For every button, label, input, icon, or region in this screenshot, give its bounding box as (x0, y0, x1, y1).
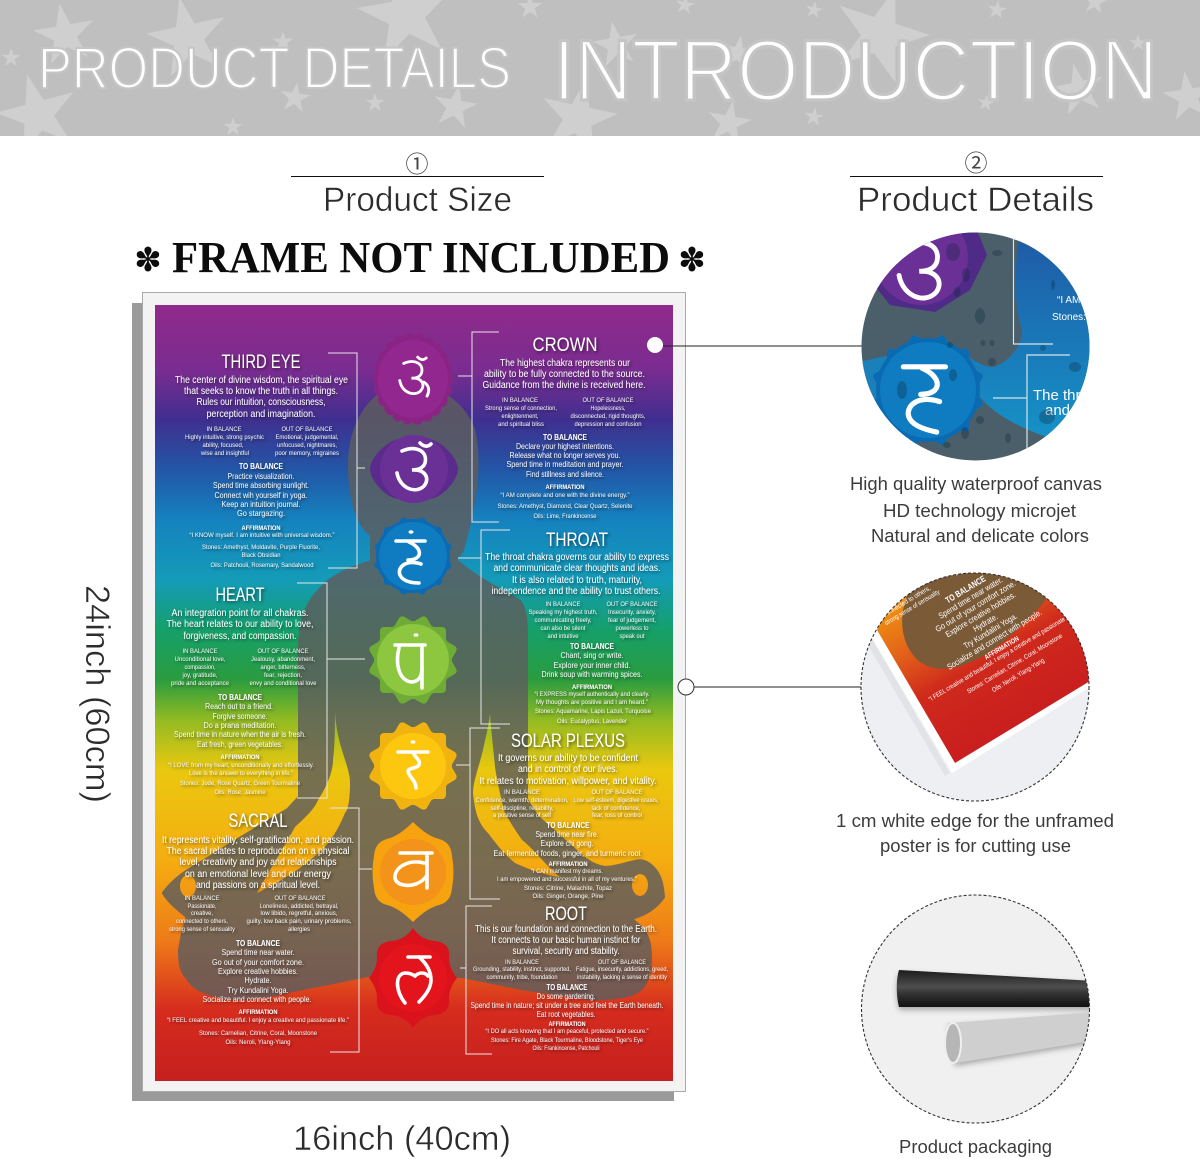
detail circle border: packaging (862, 895, 1090, 1123)
text block: sacral: Go out of your comfort zone. (212, 957, 304, 967)
text block: crown: ability to be fully connected to the source. (484, 369, 645, 380)
text block: crown: TO BALANCE (543, 432, 587, 442)
text block: throat: and intuitive (548, 633, 579, 640)
enlarged throat symbol (872, 334, 984, 446)
text block: throat: speak out (620, 633, 645, 640)
text block: crown: AFFIRMATION (546, 484, 585, 491)
text block: third eye: THIRD EYE (222, 352, 300, 373)
text block: crown: disconnected, rigid thoughts, (570, 413, 646, 420)
callout line: white edge (678, 679, 903, 695)
icon: solar plexus chakra (368, 721, 458, 811)
text block: throat: Insecurity, anxiety, (608, 609, 656, 616)
poster mockup (132, 292, 686, 1101)
text block: third eye: Keep an intuition journal. (222, 499, 300, 509)
text block: solar plexus: IN BALANCE (504, 789, 541, 796)
text block: crown: Oils: Lime, Frankincense (534, 513, 597, 520)
text block: third eye: Connect wih yourself in yoga. (214, 490, 308, 500)
text block: root: survival, security and stability. (512, 946, 620, 957)
text block: sacral: Spend time near water. (222, 947, 294, 957)
text block: heart: TO BALANCE (218, 692, 262, 702)
text block: heart: An integration point for all chakras. (172, 608, 308, 619)
text block: sacral: low libido, regretful, anxious, (260, 910, 338, 917)
enlarged poster bracket lines (993, 233, 1070, 450)
caption: white edge (836, 811, 1114, 856)
text block: solar plexus: Eat fermented foods, ginger, and turmeric root (494, 848, 641, 858)
text block: crown: Spend time in meditation and prayer. (506, 459, 624, 469)
text block: solar plexus: fear, loss of control (592, 812, 642, 819)
text block: solar plexus: Spend time near fire. (536, 829, 598, 839)
text block: heart: Reach out to a friend. (205, 701, 273, 711)
detail circle: product packaging (862, 895, 1090, 1123)
text block: third eye: TO BALANCE (239, 461, 283, 471)
text block: third eye: Spend time absorbing sunlight. (213, 480, 309, 490)
text block: throat: It is also related to truth, maturity, (512, 575, 642, 586)
text block: throat: powerless to (616, 625, 649, 632)
white tube (948, 1012, 1095, 1063)
text block: throat: AFFIRMATION (572, 684, 612, 691)
gap between left arm and torso (257, 710, 350, 893)
section heading: product size (291, 151, 544, 219)
rotated poster text: guilty, low back pain, urinary problems, (952, 516, 1046, 576)
text block: crown: Declare your highest intentions. (516, 441, 614, 451)
text block: root: AFFIRMATION (548, 1021, 586, 1028)
caption: white edge: poster is for cutting use (880, 836, 1071, 856)
text block: third eye: perception and imagination. (206, 409, 316, 420)
gap between right arm and torso (473, 713, 560, 877)
text block: sacral: guilty, low back pain, urinary problems, (246, 918, 352, 925)
text block: root: Do some gardening. (536, 991, 596, 1001)
enlarged poster text: and communicate (1045, 402, 1163, 419)
dimension label: width: 16inch (40cm) (293, 1120, 511, 1158)
caption: canvas features (850, 474, 1102, 546)
rotated poster text: Try Kundalini Yoga. (962, 611, 1019, 651)
tube end cap (945, 1023, 961, 1063)
text block: heart: Jealousy, abandonment, (251, 656, 315, 663)
text block: root: This is our foundation and connection to the Earth. (475, 924, 657, 935)
text block: throat: “I EXPRESS myself authentically and clearly. (534, 691, 650, 698)
text block: heart: compassion, (184, 664, 216, 671)
text block: throat: and communicate clear thoughts and ideas. (494, 563, 660, 574)
text block: throat: TO BALANCE (570, 641, 614, 651)
text block: throat: The throat chakra governs our ability to express (485, 552, 669, 563)
text block: sacral: level, creativity and joy and relationships (180, 857, 336, 868)
text block: solar plexus: OUT OF BALANCE (592, 789, 643, 796)
rotated poster text: TO BALANCE (944, 574, 987, 605)
detail circle: waterproof canvas close-up (862, 232, 1090, 460)
rotated poster text: Explore creative hobbies. (944, 589, 1017, 639)
text block: third eye: Black Obsidian (242, 552, 281, 559)
icon: crown chakra (378, 340, 448, 418)
text block: crown: IN BALANCE (502, 397, 539, 404)
text block: third eye: ability, focused, (202, 442, 244, 449)
text block: throat: communicating freely, (534, 617, 592, 624)
section heading: product details: ② (964, 150, 988, 176)
text block: root: IN BALANCE (505, 959, 540, 966)
text block: sacral: It represents vitality, self-gratification, and passion. (162, 835, 354, 846)
poster gradient art (155, 305, 673, 1081)
text block: solar plexus: “I CAN manifest my dreams. (531, 868, 603, 875)
caption: canvas features: High quality waterproof canvas (850, 474, 1102, 494)
text block: sacral: Oils: Neroli, Ylang-Ylang (226, 1039, 291, 1046)
text block: sacral: and passions on a spiritual level. (196, 880, 320, 891)
rotated poster text: Stones: Carnelian, Citrine, Coral, Moonstone (966, 633, 1064, 695)
text block: crown: OUT OF BALANCE (582, 397, 634, 404)
text block: sacral: connected to others, (176, 918, 228, 925)
caption: product packaging: Product packaging (899, 1137, 1052, 1157)
text block: sacral: creative, (191, 910, 213, 917)
text block: solar plexus: a positive sense of self (493, 812, 551, 819)
text block: solar plexus: Explore chi gong. (540, 838, 594, 848)
text block: solar plexus: Low self-esteem, digestive issues, (574, 797, 659, 804)
text block: solar plexus: I am empowered and successful in all of my ventures.” (497, 876, 637, 883)
enlarged poster text (1033, 296, 1085, 415)
text block: root: TO BALANCE (546, 982, 588, 992)
text block: throat: OUT OF BALANCE (606, 601, 658, 608)
text block: sacral: Try Kundalini Yoga. (228, 985, 288, 995)
text block: solar plexus: Confidence, warmth, determination, (476, 797, 569, 804)
text block: root: It connects to our basic human instinct for (492, 935, 641, 946)
text block: third eye: OUT OF BALANCE (282, 426, 333, 433)
enlarged poster text: The throat chakra (1033, 387, 1151, 404)
text block: heart: AFFIRMATION (220, 754, 260, 761)
text block: sacral: OUT OF BALANCE (274, 895, 326, 902)
text block: third eye: Practice visualization. (228, 471, 294, 481)
brown silhouette fragment (902, 565, 1047, 669)
text block: crown: Find stillness and silence. (526, 469, 604, 479)
rotated poster text: connected to others, (883, 585, 932, 618)
callout line: canvas (647, 337, 862, 353)
poster text blocks (162, 335, 669, 1052)
text block: root (470, 904, 668, 1052)
caption: canvas features: HD technology microjet (883, 501, 1076, 521)
text block: crown: Release what no longer serves you. (510, 450, 620, 460)
text block: third eye: “I KNOW myself. I am intuitive with universal wisdom.” (190, 532, 334, 539)
text block: heart: fear, rejection, (264, 672, 302, 679)
detail circle border: white edge (861, 573, 1089, 801)
text block: throat: Oils: Eucalyptus, Lavender (557, 718, 628, 725)
text block: sacral: The sacral relates to reproduction on a physical (166, 846, 350, 857)
header banner (0, 0, 1200, 136)
text block: third eye: poor memory, migraines (275, 450, 340, 457)
text block: heart: Spend time in nature when the air is fresh. (174, 729, 306, 739)
text block: third eye: Emotional, judgemental, (276, 434, 339, 441)
text block: heart: Eat fresh, green vegetables. (197, 739, 283, 749)
notice: frame not included: FRAME NOT INCLUDED (172, 233, 670, 282)
text block: root: instability, lacking a sense of identity (577, 974, 668, 981)
text block: sacral: on an emotional level and our energy (185, 869, 331, 880)
icon: sacral chakra (372, 822, 454, 922)
text block: throat: Explore your inner child. (554, 660, 630, 670)
rotated poster text: Oils: Neroli, Ylang-Ylang (991, 657, 1046, 694)
text block: crown: and spiritual bliss (498, 421, 545, 428)
text block: third eye: that seeks to know the truth in all things. (184, 386, 338, 397)
section heading: product size: Product Size (323, 181, 512, 219)
text block: sacral: SACRAL (228, 811, 288, 832)
text block: crown: CROWN (532, 335, 598, 356)
meditating body silhouette (164, 388, 663, 998)
connector brackets (297, 332, 510, 1054)
icon: throat chakra (373, 516, 453, 596)
text block: heart: anger, bitterness, (260, 664, 306, 671)
text block: throat: fear of judgement, (608, 617, 656, 624)
text block: heart: envy and conditional love (250, 680, 317, 687)
text block: sacral: strong sense of sensuality (169, 926, 236, 933)
text block: root: community, tribe, foundation (486, 974, 558, 981)
rotated poster text: “I FEEL creative and beautiful. I enjoy a creative and passionate life.” (928, 610, 1077, 703)
rotated poster text: AFFIRMATION (984, 635, 1021, 662)
text block: root: “I DO all acts knowing that I am peaceful, protected and secure.” (486, 1028, 648, 1035)
text block: third eye: IN BALANCE (206, 426, 242, 433)
text block: sacral: Stones: Carnelian, Citrine, Coral, Moonstone (199, 1030, 317, 1037)
text block: root: Stones: Fire Agate, Black Tourmaline, Bloodstone, Tiger's Eye (491, 1037, 643, 1044)
text block: solar plexus: SOLAR PLEXUS (511, 731, 625, 752)
text block: root: Spend time in nature; sit under a tree and feel the Earth beneath. (470, 1000, 664, 1010)
text block: sacral (162, 811, 354, 1046)
text block: heart: Forgive someone. (212, 711, 268, 721)
text block: third eye: Highly intuitive, strong psychic (185, 434, 265, 441)
notice: frame not included: ✽ (678, 240, 706, 279)
black tube (897, 970, 1095, 1007)
text block: root: Oils: Frankincense, Patchouli (532, 1045, 600, 1052)
enlarged poster text: “I AM complete (1057, 295, 1124, 306)
notice: frame not included: ✽ (134, 240, 162, 279)
text block: third eye (175, 352, 348, 569)
text block: throat: Speaking my highest truth, (528, 609, 598, 616)
text block: throat: Chant, sing or write. (560, 650, 624, 660)
text block: throat: Stones: Aquamarine, Lapis Lazuli, Turquoise (535, 708, 651, 715)
water droplets (897, 243, 1081, 448)
caption: white edge: 1 cm white edge for the unframed (836, 811, 1114, 831)
text block: third eye: Rules our intuition, consciousness, (196, 397, 326, 408)
rotated poster text: strong sense of sensuality (884, 588, 942, 627)
header title: product details: PRODUCT DETAILS (38, 36, 511, 101)
text block: root: Eat root vegetables. (536, 1009, 596, 1019)
text block: sacral: IN BALANCE (184, 895, 220, 902)
text block: solar plexus: lack of confidence, (592, 805, 641, 812)
text block: heart: Love is the answer to everything in life.” (189, 770, 293, 777)
text block: heart: Unconditional love, (174, 656, 226, 663)
text block: sacral: AFFIRMATION (238, 1009, 278, 1016)
text block: solar plexus: It governs our ability to be confident (498, 753, 638, 764)
text block: throat: My thoughts are positive and I am heard.” (536, 699, 648, 706)
text block: crown: Stones: Amethyst, Diamond, Clear Quartz, Selenite (498, 503, 633, 510)
text block: sacral: Explore creative hobbies. (218, 966, 298, 976)
poster shadow (132, 303, 674, 1101)
text block: crown: enlightenment, (502, 413, 539, 420)
poster white edge (142, 292, 686, 1092)
text block: crown: “I AM complete and one with the divine energy.” (500, 492, 630, 499)
text block: throat: THROAT (546, 530, 608, 551)
text block: heart: IN BALANCE (182, 648, 218, 655)
section heading: product size: ① (406, 151, 428, 177)
header title: introduction: INTRODUCTION (553, 23, 1158, 119)
text block: solar plexus: Oils: Ginger, Orange, Pine (532, 893, 604, 900)
section heading: product details (850, 150, 1103, 219)
text block: heart: The heart relates to our ability to love, (166, 619, 314, 630)
enlarged poster text: Stones: Amethyst (1052, 312, 1130, 323)
rotated poster text: Spend time near water. (937, 575, 1004, 621)
rotated poster text: Hydrate. (971, 611, 999, 634)
text block: sacral: Passionate, (188, 903, 217, 910)
text block: third eye: Stones: Amethyst, Moldavite, Purple Fluorite, (202, 544, 320, 551)
text block: heart: pride and acceptance (171, 680, 229, 687)
text block: third eye: The center of divine wisdom, the spiritual eye (175, 375, 348, 386)
text block: throat: independence and the ability to trust others. (492, 586, 660, 597)
detail circle: white edge close-up (861, 573, 1089, 801)
text block: crown: Strong sense of connection, (485, 405, 557, 412)
text block: third eye: Oils: Patchouli, Rosemary, Sandalwood (210, 562, 314, 569)
enlarged third eye symbol (877, 232, 987, 312)
text block: throat: Drink soup with warming spices. (542, 669, 642, 679)
text block: heart (166, 585, 317, 796)
text block: solar plexus: self-discipline, reliability, (490, 805, 554, 812)
text block: solar plexus (476, 731, 659, 900)
text block: heart: HEART (216, 585, 265, 606)
text block: sacral: TO BALANCE (236, 938, 280, 948)
icon: third eye chakra (370, 435, 458, 503)
text block: sacral: “I FEEL creative and beautiful. I enjoy a creative and passionate life.” (167, 1017, 349, 1024)
text block: throat: can also be silent (540, 625, 586, 632)
text block: third eye: AFFIRMATION (242, 525, 281, 532)
text block: crown: Guidance from the divine is received here. (482, 380, 646, 391)
text block: sacral: Socialize and connect with people. (202, 994, 312, 1004)
text block: throat (485, 530, 669, 725)
text block: heart: forgiveness, and compassion. (184, 631, 296, 642)
text block: sacral: Loneliness, addicted, betrayal, (260, 903, 339, 910)
rotated poster text: Socialize and connect with people. (945, 607, 1044, 672)
text block: heart: Stones: Jode, Rose Quartz, Green Tourmaline (180, 780, 300, 787)
text block: heart: “I LOVE from my heart, unconditionally and effortlessly. (168, 762, 314, 769)
text block: crown: The highest chakra represents our (500, 358, 631, 369)
text block: heart: Oils: Rose, Jasmine (214, 789, 266, 796)
text block: root: Fatigue, insecurity, addictions, greed, (576, 966, 668, 973)
icon: heart chakra (368, 615, 458, 705)
text block: heart: OUT OF BALANCE (258, 648, 309, 655)
text block: sacral: allergies (288, 926, 311, 933)
text block: crown: depression and confusion (574, 421, 642, 428)
rotated poster text: Go out of your comfort zone. (933, 578, 1017, 634)
text block: root: ROOT (545, 904, 587, 925)
text block: crown: Hopelessness, (590, 405, 626, 412)
text block: heart: Do a prana meditation. (204, 720, 276, 730)
text block: crown (482, 335, 646, 520)
caption: canvas features: Natural and delicate colors (871, 526, 1089, 546)
text block: solar plexus: Stones: Citrine, Malachite, Topaz (524, 885, 612, 892)
text block: sacral: Hydrate. (244, 975, 272, 985)
text block: third eye: Go stargazing. (237, 508, 285, 518)
section heading: product details: Product Details (857, 181, 1094, 219)
text block: solar plexus: TO BALANCE (546, 820, 590, 830)
text block: third eye: unfocused, nightmares, (277, 442, 337, 449)
text block: heart: joy, gratitude, (182, 672, 218, 679)
text block: root: OUT OF BALANCE (598, 959, 646, 966)
icon: root chakra (369, 928, 457, 1028)
text block: solar plexus: and in control of our lives. (518, 764, 618, 775)
text block: throat: IN BALANCE (546, 601, 581, 608)
dimension label: height: 24inch (60cm) (78, 585, 116, 803)
rotated poster text (884, 574, 1065, 700)
text block: solar plexus: It relates to motivation, willpower, and vitality. (480, 776, 656, 787)
text block: root: Grounding, stability, instinct, supported, (473, 966, 571, 973)
text block: solar plexus: AFFIRMATION (548, 861, 588, 868)
text block: third eye: wise and insightful (200, 450, 249, 457)
